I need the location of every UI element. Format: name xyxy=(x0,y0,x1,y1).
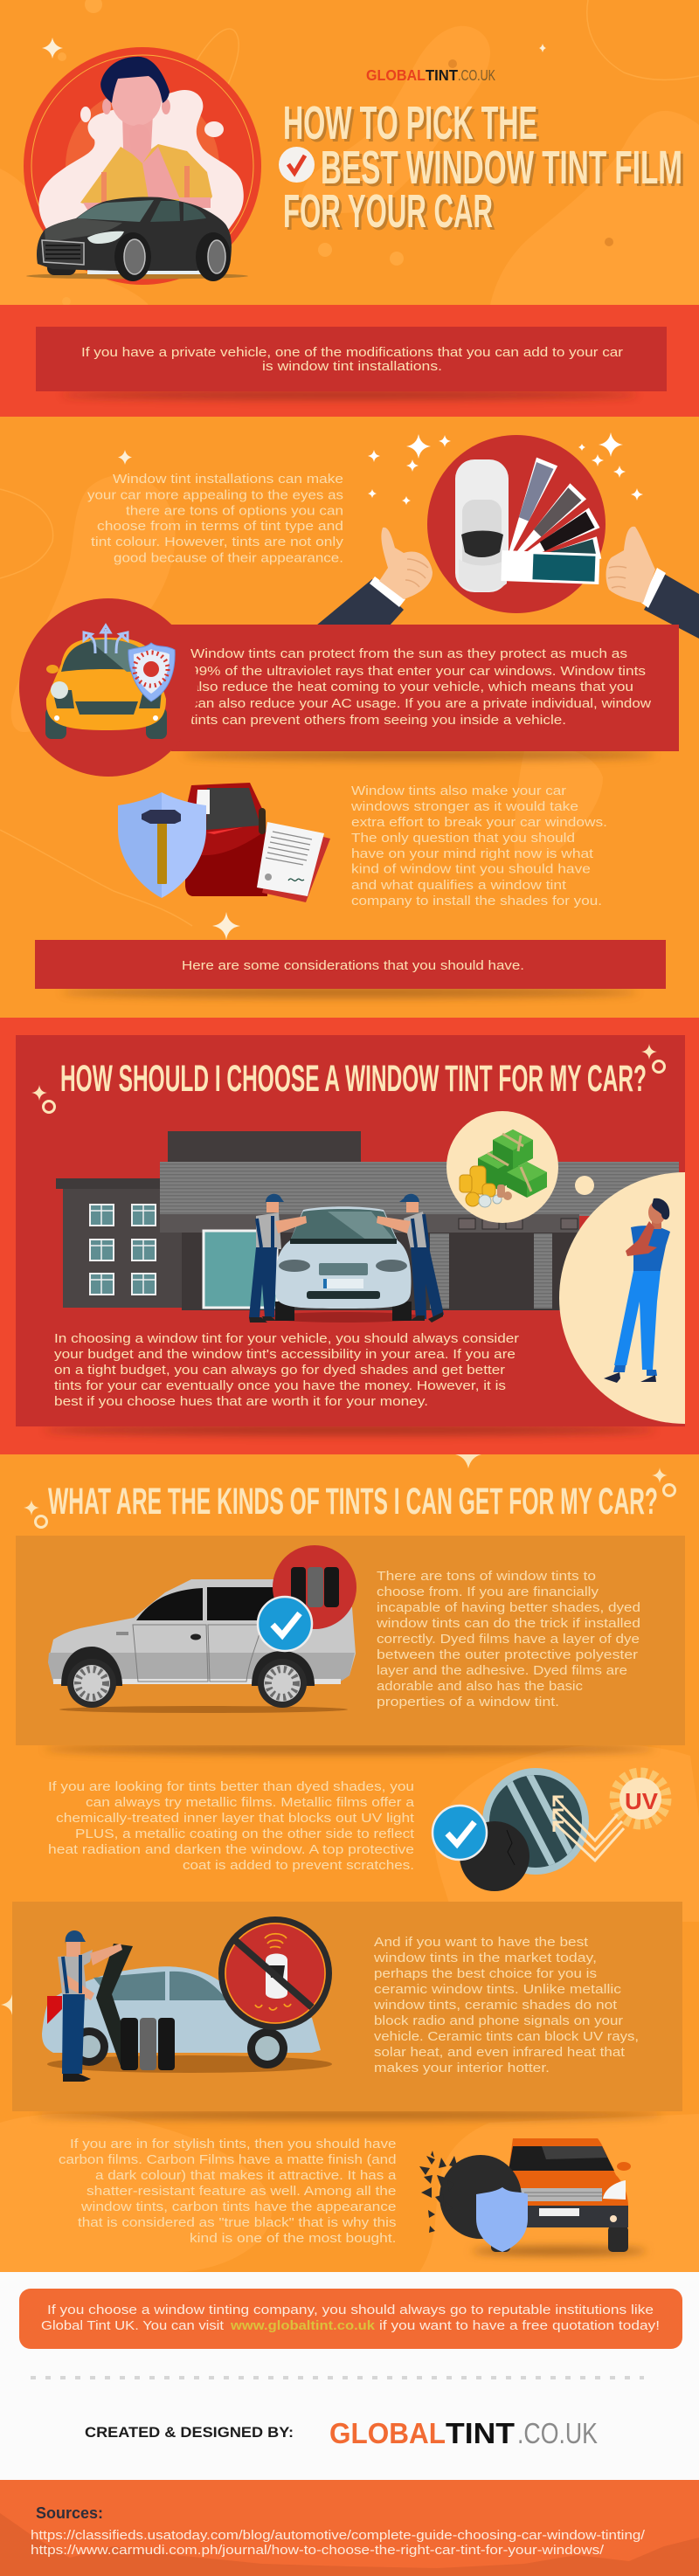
panel text xyxy=(190,647,652,728)
illustration: thinking person with black car xyxy=(24,47,261,285)
text block: carbon films: that is considered as "true black" that is why this xyxy=(78,2216,396,2230)
text block: carbon films xyxy=(59,2137,398,2246)
callout: free quotation: www.globaltint.co.uk xyxy=(230,2319,376,2333)
illustration: metallic film and UV xyxy=(433,1765,666,1891)
icon: UV rays deflected xyxy=(554,1797,624,1861)
text block: stronger windows: extra effort to break your car windows. xyxy=(351,816,607,830)
text block: carbon films: If you are in for stylish tints, then you should have xyxy=(70,2137,397,2151)
icon: sparkles and rings xyxy=(31,1044,664,1113)
text block: dyed: incapable of having better shades, dyed xyxy=(377,1601,640,1615)
panel: ceramic tints xyxy=(1,1902,682,2120)
text block: stronger windows: windows stronger as it would take xyxy=(350,800,578,814)
icon: carbon circle xyxy=(439,2155,522,2239)
icon: sparkle at section edge xyxy=(455,1454,481,1468)
text block: dyed: window tints can do the trick if installed xyxy=(376,1617,640,1631)
icon: film strip xyxy=(96,1944,136,2068)
icon: white sparkles xyxy=(368,432,643,505)
title xyxy=(279,97,682,238)
icon: yellow car with sun shield xyxy=(45,638,167,739)
logo: globaltint footer: .CO.UK xyxy=(517,2417,598,2449)
section: how to choose xyxy=(0,1018,699,1454)
text block: carbon films: carbon films. Carbon Films have a matte finish (and xyxy=(59,2153,397,2167)
illustration: orange car with carbon shard and shield xyxy=(419,2138,647,2255)
icon: rolls xyxy=(121,2018,175,2070)
panel text: tints can prevent others from seeing you inside a vehicle. xyxy=(190,714,566,728)
icon: shield with hammer xyxy=(118,792,206,898)
text block: stronger windows xyxy=(350,784,607,908)
section background: header xyxy=(0,0,699,306)
panel text: Window tints can protect from the sun as they protect as much as xyxy=(190,647,627,661)
illustration: thinking man in cream circle xyxy=(559,1172,699,1424)
text block: stronger windows: company to install the shades for you. xyxy=(351,894,602,908)
icon: sparkles and rings xyxy=(24,1468,675,1527)
text block: metallic films: If you are looking for tints better than dyed shades, you xyxy=(48,1780,414,1794)
illustration: hammer shield, car door, document xyxy=(118,783,330,902)
text block: appearance: there are tons of options you can xyxy=(126,505,343,519)
intro text xyxy=(81,346,623,374)
text block: carbon films: a dark colour) that makes it attractive. It has a xyxy=(95,2169,398,2183)
text block: ceramic: And if you want to have the best xyxy=(374,1936,588,1950)
icon: red circle xyxy=(19,598,197,777)
text block: ceramic: solar heat, and even infrared heat that xyxy=(374,2046,625,2060)
icon: shards xyxy=(419,2151,458,2233)
icon: blue check xyxy=(258,1597,312,1651)
text block: budget: on a tight budget, you can always go for dyed shades and get better xyxy=(54,1364,505,1378)
section background: tint benefits xyxy=(0,417,699,1018)
icon: no signal sign xyxy=(222,1920,329,2027)
icon: signed document xyxy=(257,822,330,902)
text block: carbon films: kind is one of the most bought. xyxy=(190,2232,397,2246)
section: white footer background xyxy=(0,2272,699,2480)
icon: sparkle small xyxy=(539,44,546,52)
intro text: is window tint installations. xyxy=(262,360,442,374)
illustration: car, worker and rolls xyxy=(42,1930,332,2082)
icon: sparkle xyxy=(118,450,132,465)
panel text: 99% of the ultraviolet rays that enter your car windows. Window tints xyxy=(190,665,646,679)
logo: globaltint header: .CO.UK xyxy=(458,66,495,84)
title: FOR YOUR CAR xyxy=(283,185,493,238)
callout: free quotation: If you choose a window tinting company, you should always go to reputable institutions like xyxy=(47,2303,654,2317)
icon: shield with sun xyxy=(128,643,175,701)
text block: ceramic: makes your interior hotter. xyxy=(374,2061,550,2075)
callout: free quotation: if you want to have a free quotation today! xyxy=(379,2319,660,2333)
text block: stronger windows: and what qualifies a window tint xyxy=(351,879,566,893)
title: HOW TO PICK THE xyxy=(283,97,537,149)
icon: UV sun xyxy=(615,1773,666,1824)
text block: ceramic: perhaps the best choice for you is xyxy=(374,1967,597,1981)
text block: budget: In choosing a window tint for your vehicle, you should always consider xyxy=(54,1332,519,1346)
icon: tint swatch fan xyxy=(494,458,601,584)
icon: tint rolls xyxy=(273,1545,356,1629)
illustration: money bubble xyxy=(446,1111,594,1223)
text block: stronger windows: have on your mind right now is what xyxy=(351,847,593,861)
intro band xyxy=(0,305,699,417)
text block: dyed: properties of a window tint. xyxy=(377,1695,559,1709)
text block: ceramic: ceramic window tints. Unlike metallic xyxy=(374,1983,621,1997)
text block: dyed: choose from. If you are financially xyxy=(377,1585,599,1599)
text block: metallic films: chemically-treated inner layer that blocks out UV light xyxy=(56,1812,414,1826)
logo: globaltint header xyxy=(366,66,495,84)
section background: kinds of tints xyxy=(0,1454,699,2272)
text block: carbon films: shatter-resistant feature as well. Among all the xyxy=(87,2185,397,2199)
text block: carbon films: window tints, carbon tints have the appearance xyxy=(80,2200,397,2214)
text block: dyed: between the outer protective polyester xyxy=(377,1648,638,1662)
text block: metallic films: coat is added to prevent scratches. xyxy=(183,1859,414,1873)
panel text: can also reduce your AC usage. If you are a private individual, window xyxy=(190,697,652,711)
icon: UV sun: UV xyxy=(625,1788,659,1814)
icon: blue check xyxy=(433,1806,487,1860)
text block: dyed: There are tons of window tints to xyxy=(377,1570,596,1584)
source links: https://classifieds.usatoday.com/blog/automotive/complete-guide-choosing-car-window-tinting/ xyxy=(31,2529,646,2543)
text block: metallic films: heat radiation and darken the window. A top protective xyxy=(48,1843,414,1857)
text block: dyed: correctly. Dyed films have a layer of dye xyxy=(377,1633,640,1647)
callout: free quotation: Global Tint UK. You can visit xyxy=(41,2319,224,2333)
text block: appearance: good because of their appearance. xyxy=(114,552,343,566)
icon: sparkle xyxy=(212,912,240,940)
icon: sparkle large xyxy=(42,38,63,59)
sources panel xyxy=(0,2480,699,2576)
text block: ceramic: window tints, ceramic shades do not xyxy=(373,1999,617,2013)
illustration: garage building xyxy=(56,1131,679,1310)
logo: globaltint footer: GLOBAL xyxy=(329,2417,446,2449)
icon: left worker xyxy=(249,1194,307,1323)
icon: right worker xyxy=(377,1194,444,1323)
text block: dyed xyxy=(376,1570,640,1709)
icon: car top view xyxy=(455,459,509,592)
intro text: If you have a private vehicle, one of the modifications that you can add to your car xyxy=(81,346,623,360)
logo: globaltint header: GLOBAL xyxy=(366,66,426,84)
logo: globaltint header: TINT xyxy=(426,66,458,84)
text block: budget: your budget and the window tint's accessibility in your area. If you are xyxy=(54,1348,516,1362)
text block: appearance: your car more appealing to the eyes as xyxy=(87,489,343,503)
text block: budget: best if you choose hues that are worth it for your money. xyxy=(54,1395,428,1409)
illustration: silver car xyxy=(48,1579,356,1713)
source links xyxy=(31,2529,646,2558)
text block: appearance xyxy=(87,473,344,566)
text block: ceramic: vehicle. Ceramic tints can block UV rays, xyxy=(374,2030,639,2044)
logo: globaltint footer: TINT xyxy=(446,2417,515,2449)
panel: dyed tints xyxy=(16,1536,685,1754)
icon: check badge xyxy=(279,147,315,183)
text block: dyed: layer and the adhesive. Dyed films are xyxy=(377,1664,627,1678)
text block: appearance: choose from in terms of tint type and xyxy=(97,520,343,534)
icon: worker xyxy=(58,1930,122,2082)
illustration: tint swatches and thumbs up xyxy=(316,432,699,639)
icon: left thumbs up xyxy=(316,528,433,625)
sources heading: Sources: xyxy=(36,2504,103,2522)
text block: appearance: tint colour. However, tints are not only xyxy=(91,535,344,549)
icon: arrows up xyxy=(84,625,128,653)
callout: considerations: Here are some considerations that you should have. xyxy=(182,959,524,973)
illustration: workers installing tint on car xyxy=(249,1194,444,1323)
text block: stronger windows: Window tints also make your car xyxy=(351,784,566,798)
text block: stronger windows: The only question that you should xyxy=(351,832,575,846)
text block: stronger windows: kind of window tint you should have xyxy=(351,863,591,877)
callout: free quotation xyxy=(19,2289,682,2349)
source links: https://www.carmudi.com.ph/journal/how-to-choose-the-right-car-tint-for-your-windows/ xyxy=(31,2544,605,2558)
text block: appearance: Window tint installations can make xyxy=(113,473,343,487)
text block: ceramic xyxy=(373,1936,639,2075)
text block: budget: tints for your car eventually once you have the money. However, it is xyxy=(54,1379,506,1393)
logo: globaltint footer xyxy=(329,2417,598,2449)
callout: considerations xyxy=(35,940,666,998)
text block: budget xyxy=(54,1332,519,1409)
text block: metallic films: can always try metallic films. Metallic films offer a xyxy=(86,1796,415,1810)
icon: right thumbs up xyxy=(606,527,699,639)
text block: metallic films xyxy=(48,1780,415,1873)
dotted divider xyxy=(31,2376,644,2379)
text block: dyed: adorable and also has the basic xyxy=(377,1680,583,1694)
text block: ceramic: window tints in the market today, xyxy=(373,1951,597,1965)
panel: sun protection xyxy=(19,598,679,777)
text block: metallic films: PLUS, a metallic coating on the other side to reflect xyxy=(75,1827,414,1841)
icon: blue shield xyxy=(476,2187,528,2252)
text block: ceramic: block radio and phone signals on your xyxy=(374,2014,623,2028)
panel text: also reduce the heat coming to your vehicle, which means that you xyxy=(190,680,633,694)
credit text: CREATED & DESIGNED BY: xyxy=(85,2424,294,2441)
icon: sparkle at panel edge xyxy=(1,1994,12,2015)
